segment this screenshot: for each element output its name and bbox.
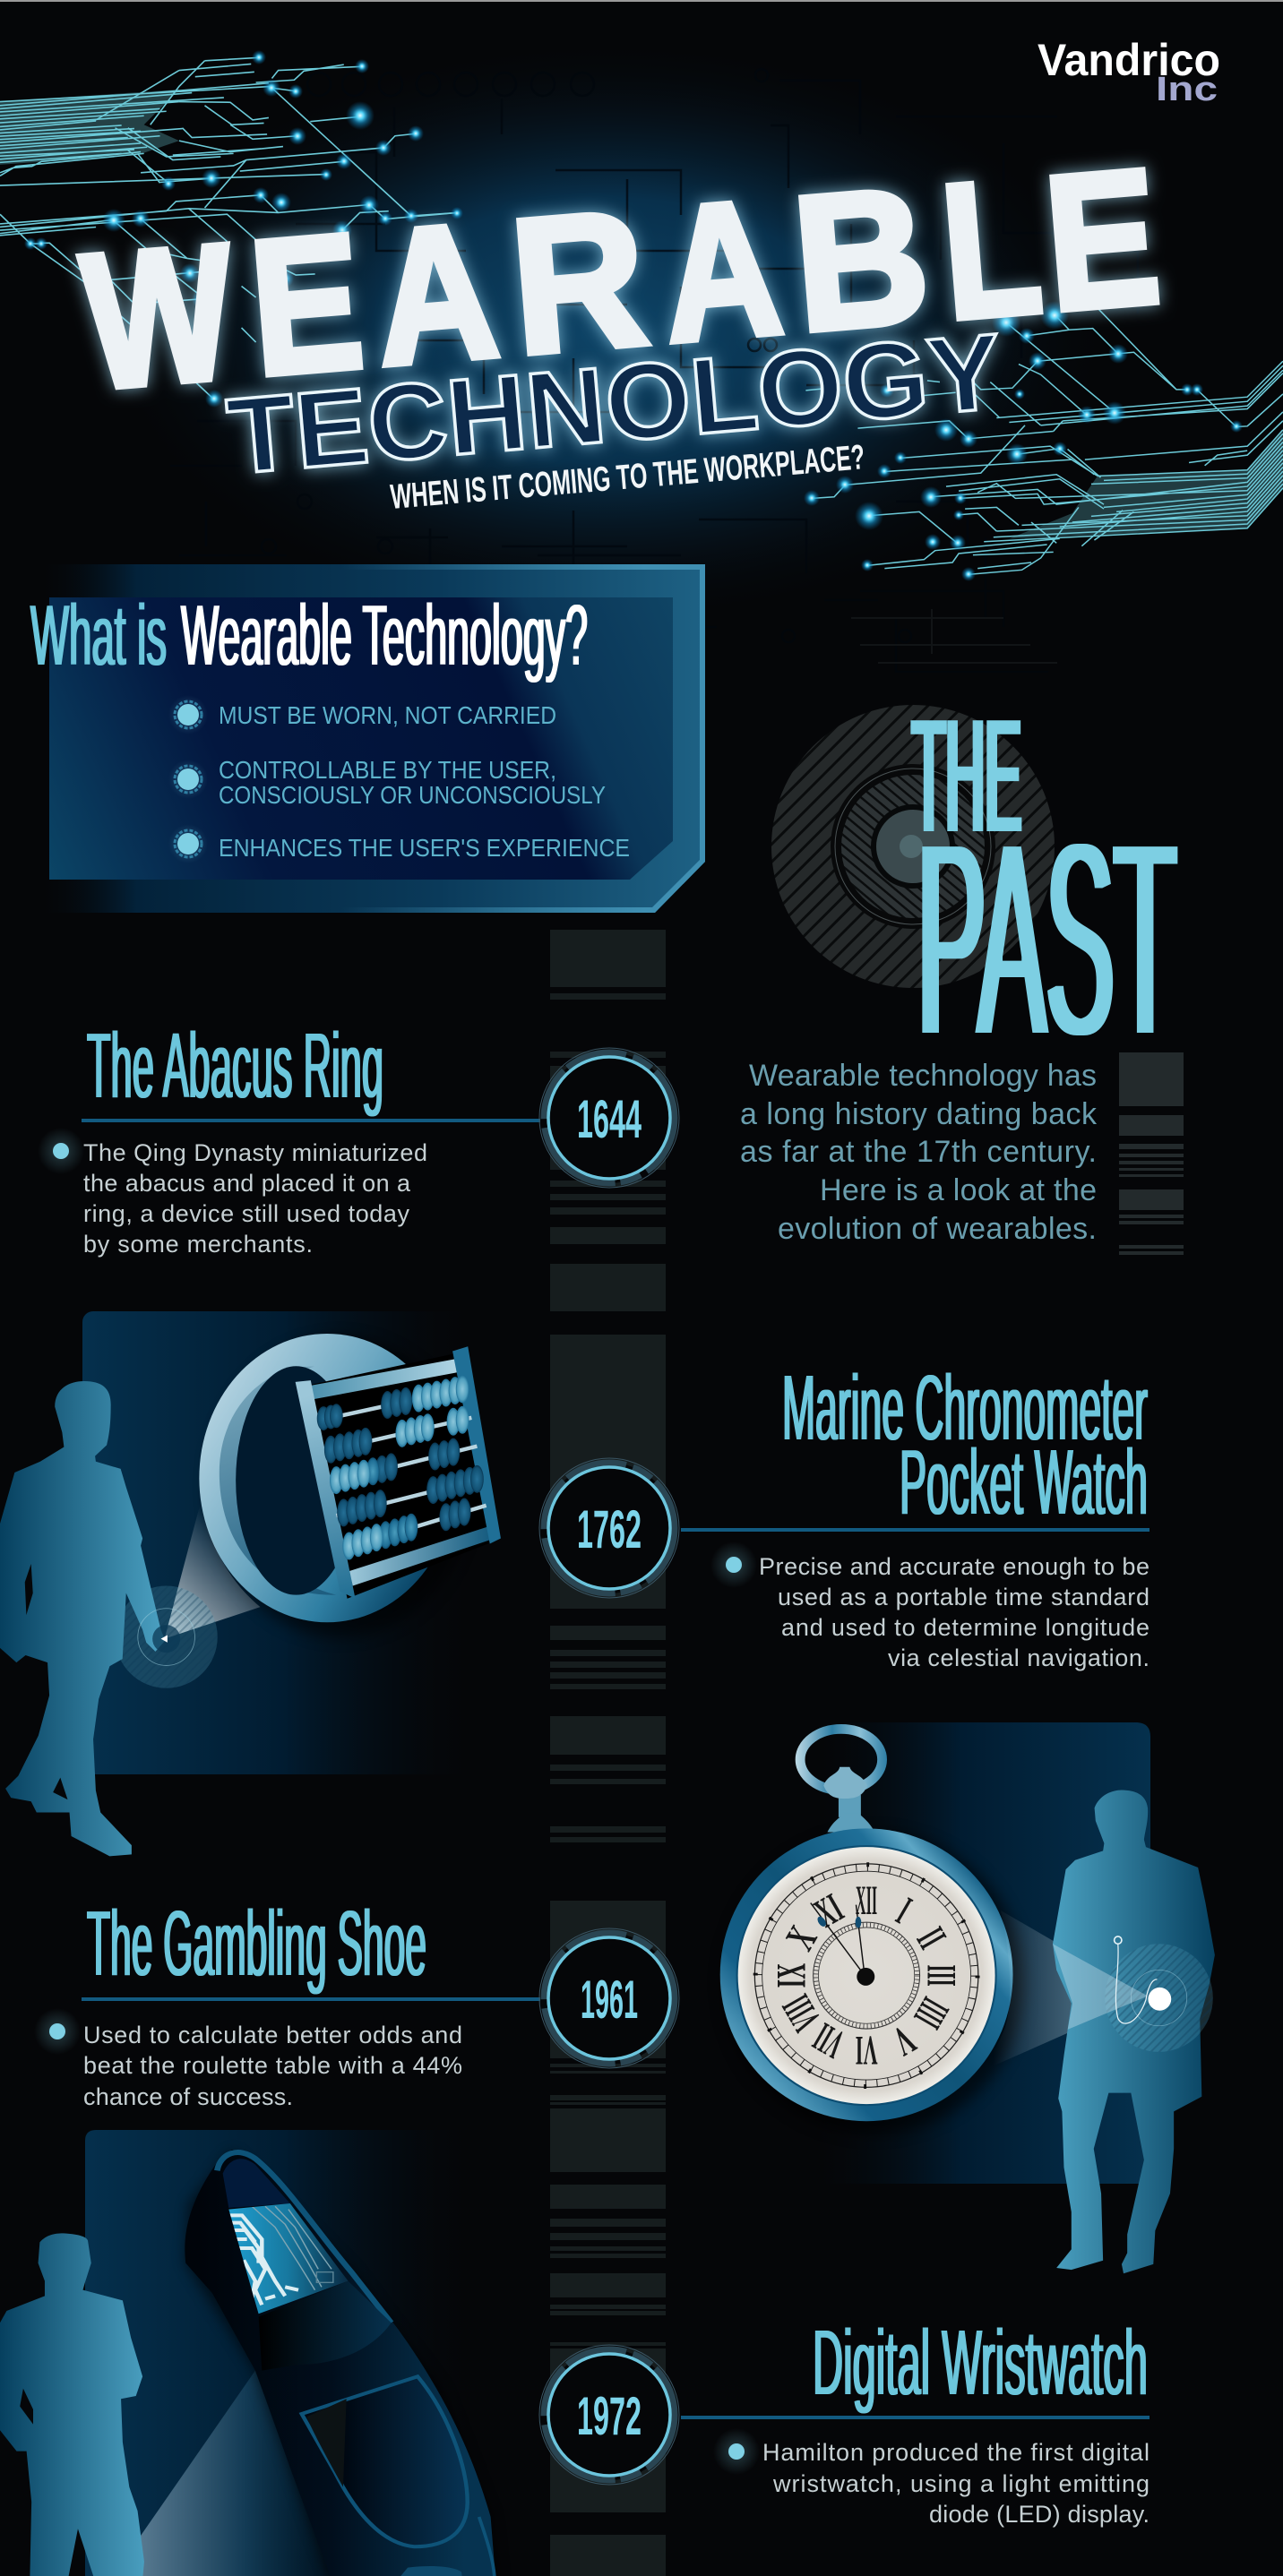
circuit lines: right cluster — [805, 302, 1283, 574]
panel: gambling shoe illustration — [0, 2130, 497, 2576]
intro text: a long history dating back — [740, 1097, 1098, 1131]
entry: the gambling shoe: The Gambling Shoe — [87, 1892, 426, 1995]
bullet: enhances experience — [168, 824, 630, 863]
entry: the abacus ring: The Qing Dynasty miniaturized — [83, 1139, 427, 1166]
entry: digital wristwatch: wristwatch, using a light emitting — [772, 2470, 1150, 2497]
logo: Vandrico Inc: Vandrico — [1038, 35, 1220, 85]
intro text: Here is a look at the — [820, 1173, 1097, 1207]
roman numerals: IX — [770, 1963, 815, 1988]
strip beside intro text — [1119, 1052, 1184, 1255]
bullet: controllable by the user — [168, 756, 606, 809]
silhouette: man standing — [0, 2233, 144, 2576]
bullet: controllable by the user: CONSCIOUSLY OR UNCONSCIOUSLY — [219, 781, 606, 809]
panel: abacus ring illustration — [0, 1311, 501, 1856]
logo: Vandrico Inc — [1038, 35, 1220, 108]
roman numerals: X — [778, 1919, 827, 1958]
year badge: 1644 — [539, 1048, 679, 1188]
intro text: evolution of wearables. — [778, 1212, 1097, 1246]
entry: the abacus ring: by some merchants. — [83, 1231, 313, 1258]
year badge: 1961: 1961 — [581, 1970, 638, 2030]
bullet: must be worn — [168, 695, 556, 734]
roman numerals — [770, 1878, 964, 2073]
central timeline strip — [550, 930, 666, 2576]
roman numerals: I — [889, 1889, 918, 1933]
light cone — [975, 1911, 1150, 2074]
faint circuit board traces — [170, 69, 1138, 672]
bullet: must be worn: MUST BE WORN, NOT CARRIED — [219, 701, 556, 729]
abacus ring shadow — [209, 1337, 471, 1637]
entry: digital wristwatch — [681, 2311, 1150, 2528]
shoe shadow — [185, 2150, 497, 2576]
year badge: 1644: 1644 — [577, 1089, 642, 1149]
title: WEARABLE: A — [655, 159, 788, 382]
entry: marine chronometer pocket watch: Precise and accurate enough to be — [759, 1553, 1150, 1580]
roman numerals: V — [884, 2016, 923, 2065]
year badge: 1762 — [539, 1458, 679, 1598]
subtitle: TECHNOLOGY: TECHNOLOGY — [223, 311, 1006, 497]
bullet: controllable by the user: CONTROLLABLE BY THE USER, — [219, 756, 556, 784]
entry: marine chronometer pocket watch: via celestial navigation. — [888, 1644, 1150, 1671]
roman numerals: VI — [856, 2027, 878, 2073]
roman numerals: XI — [807, 1885, 851, 1936]
entry: digital wristwatch: Hamilton produced the first digital — [762, 2439, 1150, 2466]
title: WEARABLE: B — [787, 148, 936, 372]
title: WEARABLE — [75, 129, 1167, 430]
light cone — [139, 2371, 332, 2576]
entry: marine chronometer pocket watch: used as a portable time standard — [778, 1584, 1150, 1610]
year badge: 1762: 1762 — [577, 1499, 642, 1559]
intro text: Wearable technology has — [749, 1059, 1097, 1093]
entry: digital wristwatch: diode (LED) display. — [929, 2501, 1150, 2528]
roman numerals: III — [918, 1965, 964, 1987]
bullet: enhances experience: ENHANCES THE USER'S EXPERIENCE — [219, 834, 630, 862]
roman numerals: XII — [856, 1878, 877, 1924]
pocket watch case and dial — [720, 1828, 1013, 2121]
logo: Vandrico Inc: Inc — [1156, 71, 1218, 108]
tagline: WHEN IS IT COMING TO THE WORKPLACE? — [389, 438, 866, 517]
title: WEARABLE: E — [244, 193, 370, 416]
glowing circuit nodes — [24, 50, 1243, 581]
heading: the past: THE — [912, 687, 1021, 864]
intro text — [740, 1059, 1098, 1246]
entry: the gambling shoe: beat the roulette table with a 44% — [83, 2052, 462, 2079]
shoe circuit window — [228, 2203, 348, 2314]
title: WEARABLE: A — [367, 183, 504, 406]
entry: the abacus ring: The Abacus Ring — [87, 1014, 383, 1117]
roman numerals: VII — [806, 2014, 852, 2066]
silhouette: man in coat — [1053, 1790, 1215, 2273]
entry: the gambling shoe: Used to calculate better odds and — [83, 2022, 462, 2048]
panel: what is wearable technology: Wearable Technology? — [181, 588, 588, 683]
year badge: 1961 — [539, 1928, 679, 2068]
entry: marine chronometer pocket watch — [681, 1356, 1150, 1671]
year badge: 1972 — [539, 2345, 679, 2485]
abacus — [296, 1346, 501, 1599]
heading: what is wearable technology — [30, 588, 588, 683]
panel: what is wearable technology — [30, 564, 705, 913]
intro text: as far at the 17th century. — [740, 1135, 1097, 1169]
pocket watch bow and crown — [800, 1729, 883, 1833]
entry: marine chronometer pocket watch: and used to determine longitude — [781, 1614, 1150, 1641]
title: WEARABLE: R — [504, 170, 654, 395]
circuit lines: left cluster — [0, 57, 458, 399]
roman numerals: IIII — [905, 1990, 957, 2036]
panel: pocket watch illustration — [720, 1722, 1215, 2273]
header glow background — [0, 0, 1283, 645]
entry: the gambling shoe: chance of success. — [83, 2083, 293, 2110]
heading: what is wearable technology: What is — [30, 588, 167, 683]
roman numerals: II — [908, 1920, 954, 1956]
ring — [199, 1334, 455, 1622]
entry: the abacus ring: the abacus and placed it on a — [83, 1170, 411, 1197]
shoe — [185, 2150, 495, 2576]
the past target graphic — [771, 705, 1055, 988]
entry: the gambling shoe — [34, 1892, 540, 2110]
light cone — [165, 1498, 260, 1639]
title: WEARABLE: E — [1038, 129, 1167, 351]
roman numerals: VIII — [774, 1988, 830, 2039]
silhouette: man walking — [0, 1381, 218, 1856]
entry: the abacus ring: ring, a device still used today — [83, 1200, 410, 1227]
title: WEARABLE: W — [75, 204, 241, 430]
title: WEARABLE: L — [934, 139, 1048, 360]
watch hands — [811, 1903, 874, 1986]
year badge: 1972: 1972 — [577, 2386, 642, 2446]
entry: the abacus ring — [38, 1014, 540, 1258]
heading: the past — [912, 687, 1176, 1094]
watch shadow — [723, 1833, 1025, 2134]
